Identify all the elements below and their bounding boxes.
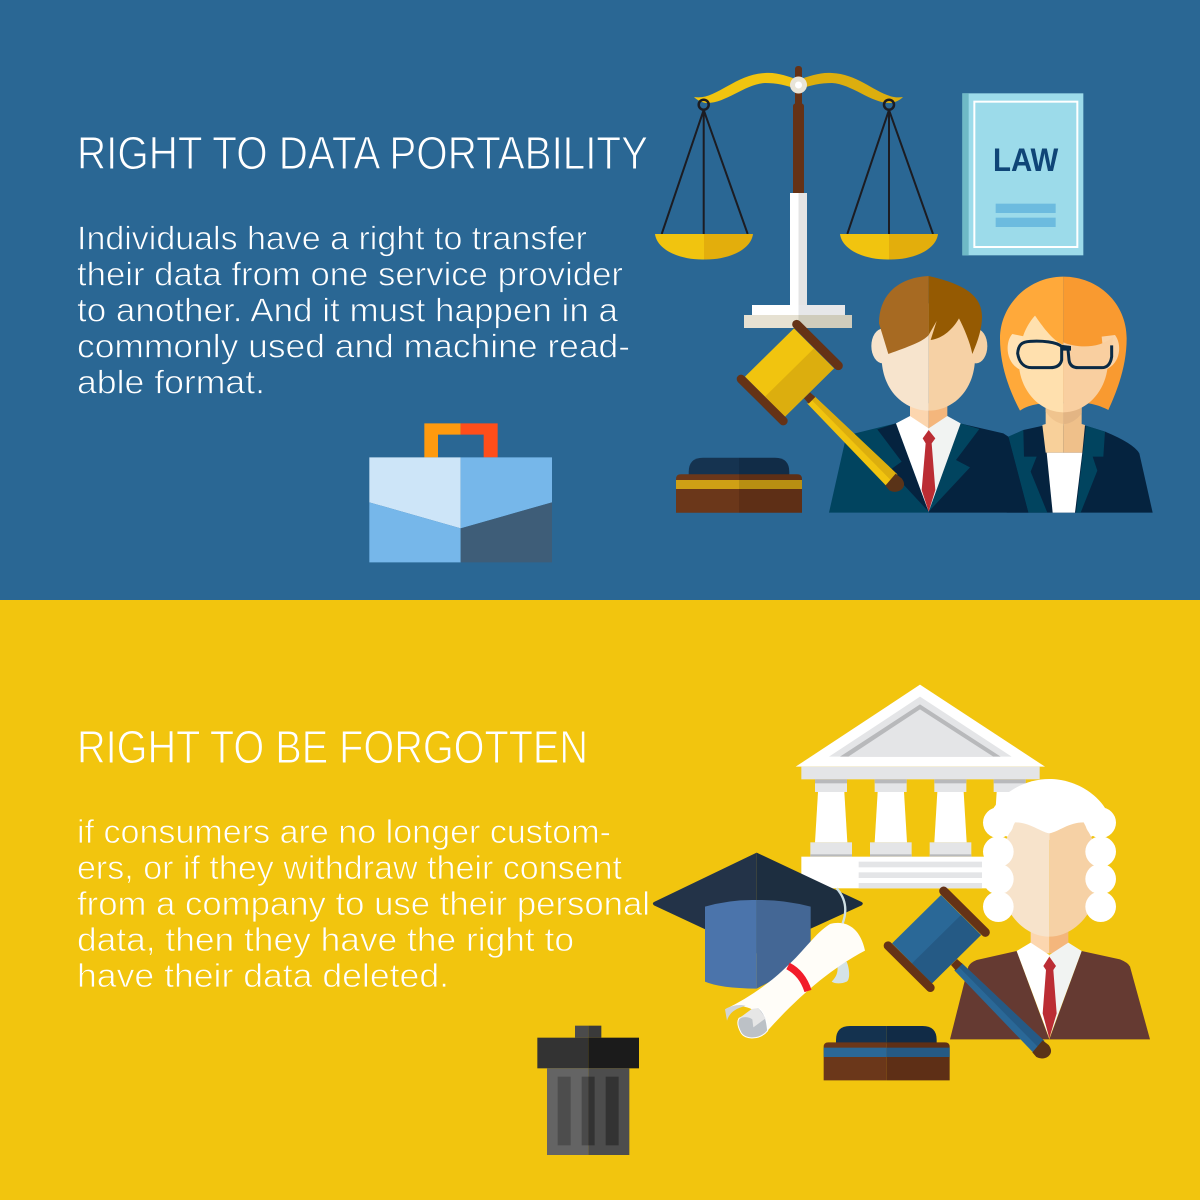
panel: right to data portability <box>0 0 1200 600</box>
heading: right to data portability: RIGHT TO DATA PORTABILITY <box>77 127 648 179</box>
icon: blue gavel <box>888 891 1051 1059</box>
text block: forgotten description: have their data deleted. <box>77 957 449 994</box>
icon: courthouse <box>796 685 1045 888</box>
panel: right to be forgotten <box>0 600 1200 1200</box>
text block: portability description: their data from one service provider <box>77 256 623 292</box>
text block: portability description: Individuals have a right to transfer <box>77 220 587 256</box>
icon: judge <box>950 779 1150 1039</box>
icon: blue sound block <box>824 1026 950 1080</box>
text block: forgotten description: ers, or if they withdraw their consent <box>77 849 622 886</box>
text block: portability description: commonly used and machine read- <box>77 328 630 364</box>
icon: scales of justice <box>655 66 938 328</box>
icon: sound block <box>676 458 802 513</box>
text block: forgotten description <box>77 813 650 994</box>
label: LAW: LAW <box>993 142 1059 178</box>
heading: right to be forgotten: RIGHT TO BE FORGOTTEN <box>77 721 588 773</box>
icon: briefcase <box>369 423 552 562</box>
icon: man in suit <box>829 276 1028 513</box>
text block: forgotten description: if consumers are no longer custom- <box>77 813 611 850</box>
text block: portability description <box>77 220 630 400</box>
text block: portability description: able format. <box>77 364 265 400</box>
icon: trash can <box>537 1026 639 1155</box>
icon: graduation cap and diploma <box>653 853 865 1038</box>
text block: forgotten description: data, then they have the right to <box>77 921 574 958</box>
icon: gavel <box>741 324 904 492</box>
text block: portability description: to another. And it must happen in a <box>77 292 619 328</box>
text block: forgotten description: from a company to use their personal <box>77 885 650 922</box>
icon: woman in suit <box>1000 277 1153 513</box>
icon: law book <box>962 93 1083 255</box>
